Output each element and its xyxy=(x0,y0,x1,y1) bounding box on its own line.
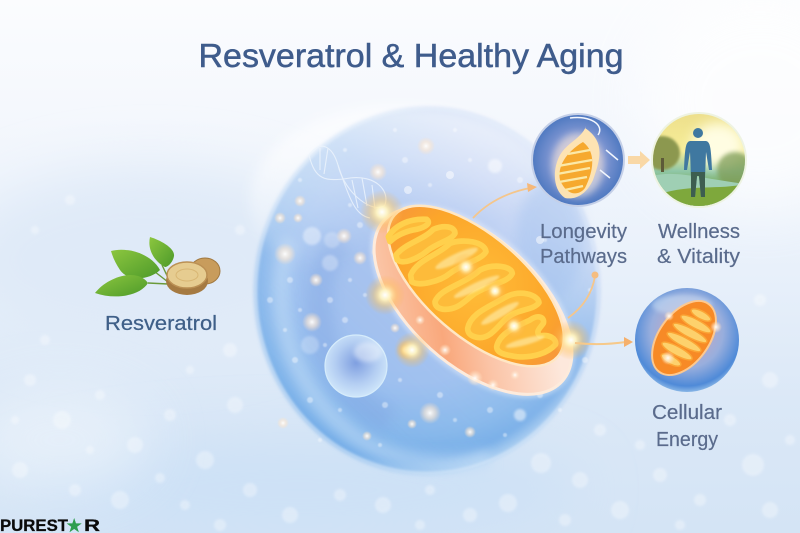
label: wellness and vitality: & Vitality xyxy=(657,246,740,268)
icon: cellular energy mitochondrion circle xyxy=(635,288,739,392)
arrow: mitochondrion upward branch xyxy=(568,272,598,318)
stems xyxy=(148,265,170,284)
inner cell swirl xyxy=(281,240,490,463)
root slice: front xyxy=(166,267,208,295)
root slice: rear xyxy=(190,258,220,284)
mitochondrion xyxy=(335,167,611,435)
label: cellular energy: Cellular xyxy=(652,402,722,424)
background bokeh particles xyxy=(11,195,795,531)
cristae folds xyxy=(388,219,556,357)
icon: wellness and vitality circle xyxy=(651,112,747,208)
icon: longevity pathways DNA circle xyxy=(531,113,625,207)
leaf: middle xyxy=(111,250,160,278)
label: longevity pathways: Longevity xyxy=(540,221,627,243)
membrane glints xyxy=(360,190,591,391)
person silhouette xyxy=(684,128,712,197)
label: wellness and vitality: Wellness xyxy=(658,221,740,243)
icon: resveratrol leaves and root slices xyxy=(95,237,220,296)
label: cellular energy: Energy xyxy=(656,429,718,451)
cristae highlights xyxy=(434,244,545,350)
title: Resveratrol & Healthy Aging xyxy=(198,37,624,74)
right-side blue haze xyxy=(516,180,584,300)
label: resveratrol: Resveratrol xyxy=(105,313,217,335)
large cell sphere xyxy=(250,105,601,476)
arrow: mitochondrion to cellular energy xyxy=(575,337,633,347)
leaf: top xyxy=(149,237,174,267)
label: longevity pathways: Pathways xyxy=(540,246,627,268)
small vesicle bubble xyxy=(325,335,387,397)
cell particles xyxy=(274,137,544,441)
leaf: lower xyxy=(95,275,148,296)
cell fine particles xyxy=(267,128,592,447)
DNA helix inside cell xyxy=(309,146,386,218)
arrow: longevity to wellness xyxy=(628,151,650,169)
arrow: mitochondrion to longevity pathways xyxy=(473,183,537,218)
